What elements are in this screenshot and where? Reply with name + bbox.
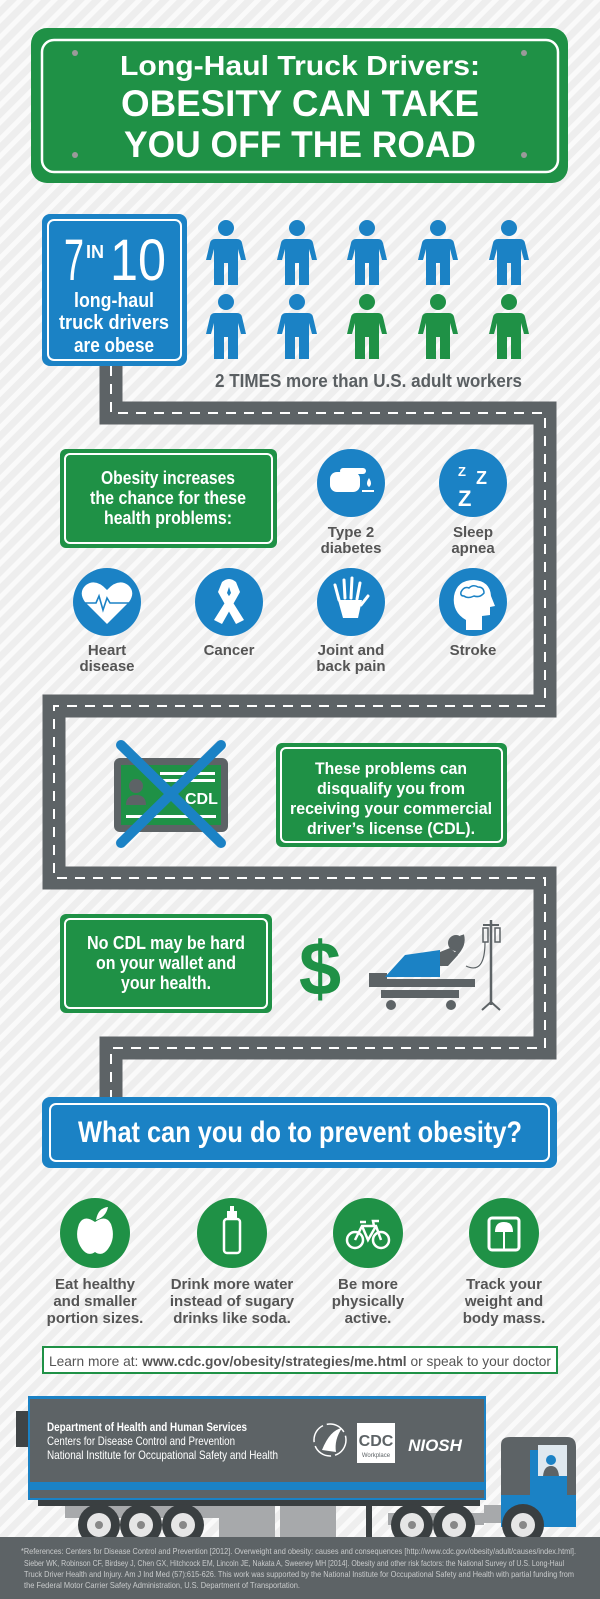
comparison text: 2 TIMES more than U.S. adult workers bbox=[215, 371, 522, 391]
icon: joint and back pain bbox=[316, 568, 386, 675]
blue sign: 7 in 10: truck drivers bbox=[59, 312, 169, 334]
icon: crossed-out CDL card bbox=[114, 745, 228, 843]
logos: CDC bbox=[359, 1433, 394, 1450]
green box: disqualify CDL bbox=[276, 743, 507, 847]
road bbox=[54, 366, 545, 1097]
green box: obesity increases: health problems: bbox=[104, 508, 232, 528]
title text: Long-Haul Truck Drivers: bbox=[120, 50, 480, 81]
icon: sleep apnea: Z bbox=[458, 464, 466, 479]
icon: apple bbox=[47, 1198, 143, 1327]
green box: disqualify CDL: receiving your commercial bbox=[290, 799, 492, 818]
blue sign: 7 in 10: 7 bbox=[64, 228, 84, 293]
title text: OBESITY CAN TAKE bbox=[121, 83, 479, 124]
footer references: the Federal Motor Carrier Safety Administration, U.S. Department of Transportation. bbox=[24, 1580, 300, 1590]
learn more box bbox=[43, 1347, 557, 1373]
green box: no CDL hard on wallet bbox=[60, 914, 272, 1013]
icon: cancer ribbon: Cancer bbox=[204, 642, 255, 659]
icon: heart disease bbox=[73, 568, 141, 675]
icon: bicycle: physically bbox=[332, 1293, 405, 1310]
icon: heart disease: disease bbox=[79, 658, 135, 675]
green box: obesity increases: the chance for these bbox=[90, 488, 246, 508]
blue sign: prevention question bbox=[42, 1097, 557, 1168]
logos bbox=[314, 1423, 463, 1463]
wheels bbox=[78, 1504, 544, 1546]
truck bbox=[16, 1396, 576, 1546]
icon: water bottle bbox=[170, 1198, 295, 1327]
agency text: National Institute for Occupational Safety and Health bbox=[47, 1448, 278, 1462]
green box: obesity increases bbox=[60, 449, 277, 548]
logos: NIOSH bbox=[408, 1436, 463, 1455]
people chart bbox=[206, 220, 529, 359]
icon: scale: weight and bbox=[464, 1293, 543, 1310]
title sign bbox=[31, 28, 568, 183]
icon: scale: body mass. bbox=[463, 1310, 545, 1327]
icon: bicycle bbox=[332, 1198, 405, 1327]
icon: bicycle: Be more bbox=[338, 1276, 398, 1293]
icon: bicycle: active. bbox=[345, 1310, 391, 1327]
green box: no CDL hard on wallet: your health. bbox=[121, 973, 211, 993]
agency text: Centers for Disease Control and Prevention bbox=[47, 1434, 235, 1448]
green box: no CDL hard on wallet: on your wallet and bbox=[96, 953, 236, 973]
icon: water bottle: drinks like soda. bbox=[173, 1310, 291, 1327]
green box: disqualify CDL: These problems can bbox=[315, 759, 467, 778]
icon: apple: and smaller bbox=[53, 1293, 137, 1310]
learn more box: Learn more at: www.cdc.gov/obesity/strategies/me.html or speak to your doctor bbox=[49, 1353, 551, 1369]
green box: disqualify CDL: disqualify you from bbox=[317, 779, 465, 798]
green box: obesity increases: Obesity increases bbox=[101, 468, 235, 488]
blue sign: 7 in 10: IN bbox=[86, 242, 104, 262]
green box: no CDL hard on wallet: No CDL may be hard bbox=[87, 933, 245, 953]
green box: disqualify CDL: driver’s license (CDL). bbox=[307, 819, 475, 838]
blue sign: 7 in 10: long-haul bbox=[74, 290, 154, 312]
icon: dollar sign: $ bbox=[299, 927, 341, 1012]
blue sign: 7 in 10: are obese bbox=[74, 335, 154, 357]
undercarriage bbox=[65, 1506, 222, 1518]
blue sign: prevention question: What can you do to prevent obesity? bbox=[78, 1116, 522, 1149]
cab bbox=[501, 1437, 576, 1527]
blue sign: 7 in 10 bbox=[42, 214, 187, 366]
trailer bbox=[16, 1411, 28, 1447]
icon: type 2 diabetes: diabetes bbox=[321, 540, 381, 557]
icon: joint and back pain: back pain bbox=[316, 658, 386, 675]
title text: YOU OFF THE ROAD bbox=[124, 124, 476, 165]
icon: hospital bed bbox=[369, 920, 500, 1010]
icon: type 2 diabetes bbox=[317, 449, 385, 557]
blue sign: 7 in 10: 10 bbox=[110, 228, 166, 293]
icon: sleep apnea: Z bbox=[476, 468, 487, 488]
icon: sleep apnea: Z bbox=[458, 486, 471, 511]
icon: water bottle: instead of sugary bbox=[170, 1293, 295, 1310]
icon: type 2 diabetes: Type 2 bbox=[328, 524, 374, 541]
agency text: Department of Health and Human Services bbox=[47, 1420, 247, 1434]
icon: heart disease: Heart bbox=[88, 642, 126, 659]
agency text bbox=[47, 1420, 278, 1462]
icon: apple: portion sizes. bbox=[47, 1310, 143, 1327]
icon: scale bbox=[463, 1198, 545, 1327]
icon: stroke: Stroke bbox=[450, 642, 496, 659]
logos: Workplace bbox=[362, 1453, 391, 1459]
icon: sleep apnea: Sleep bbox=[453, 524, 493, 541]
icon: stroke bbox=[439, 568, 507, 659]
icon: cancer ribbon bbox=[195, 568, 263, 659]
icon: scale: Track your bbox=[466, 1276, 542, 1293]
icon: sleep apnea bbox=[439, 449, 507, 557]
icon: apple: Eat healthy bbox=[55, 1276, 136, 1293]
icon: water bottle: Drink more water bbox=[171, 1276, 293, 1293]
icon: sleep apnea: apnea bbox=[451, 540, 495, 557]
footer references bbox=[0, 1537, 600, 1599]
icon: joint and back pain: Joint and bbox=[318, 642, 384, 659]
title text bbox=[120, 50, 480, 165]
icon: crossed-out CDL card: CDL bbox=[185, 791, 218, 808]
